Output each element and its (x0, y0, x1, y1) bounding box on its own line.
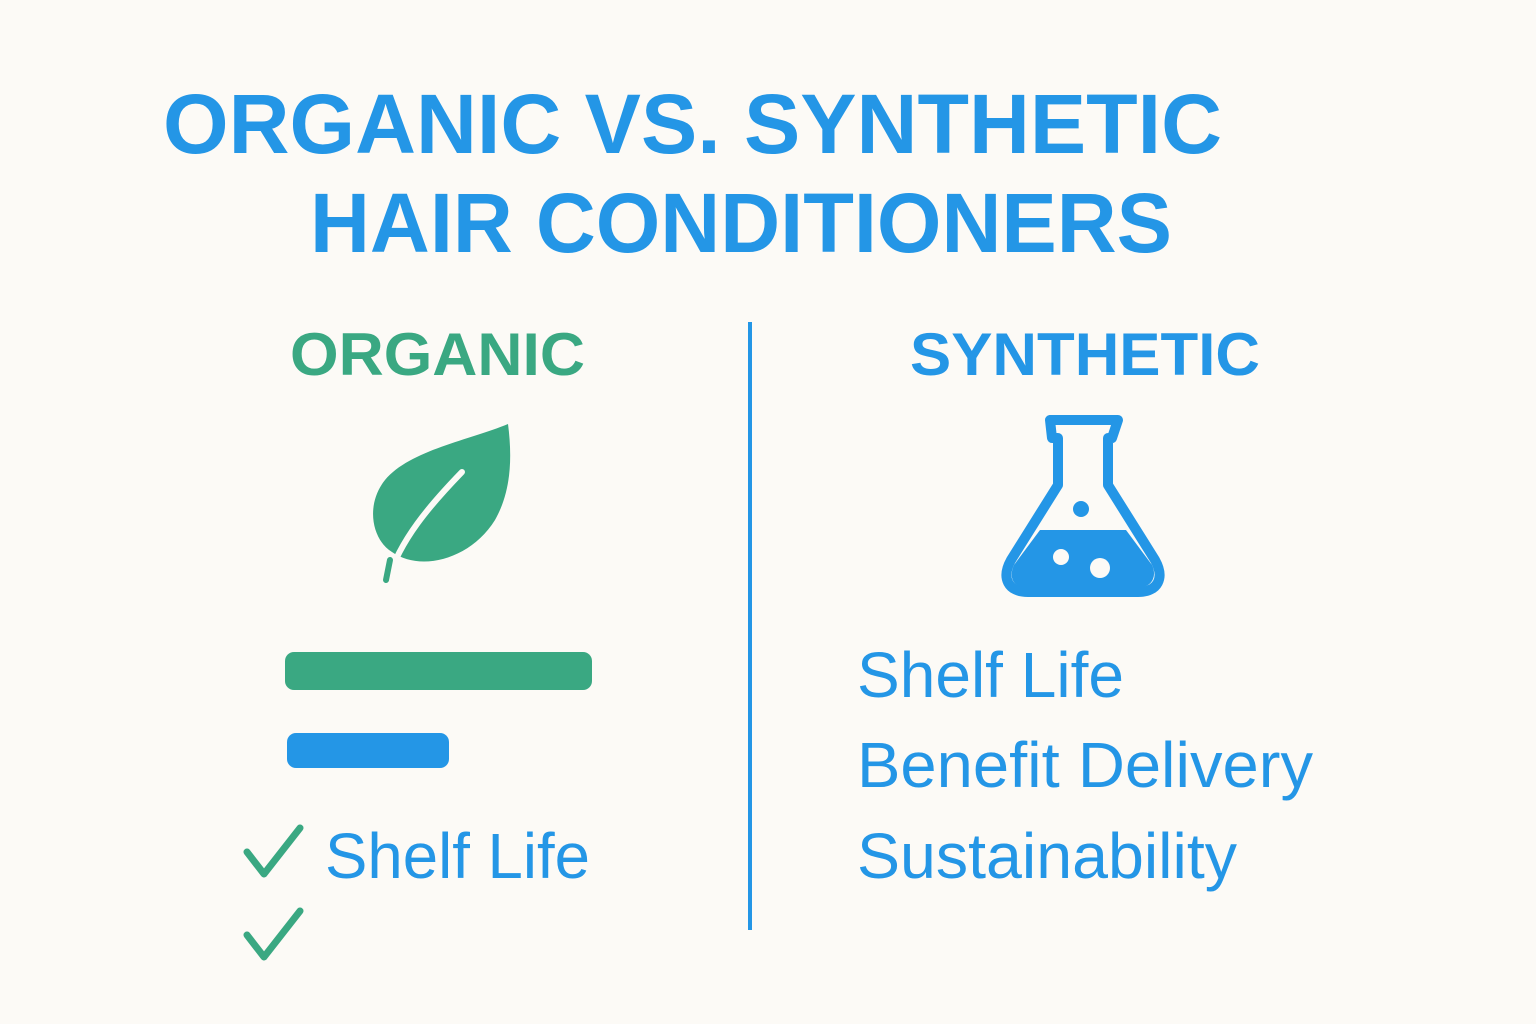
list: synthetic: Sustainability (857, 820, 1237, 892)
title: HAIR CONDITIONERS (310, 176, 1172, 270)
icon: leaf (373, 424, 510, 580)
checklist: organic (247, 820, 590, 957)
heading: synthetic: SYNTHETIC (910, 321, 1260, 388)
checklist: organic: Shelf Life (325, 820, 590, 892)
bar: organic green (285, 652, 592, 690)
list: synthetic: Benefit Delivery (857, 729, 1313, 801)
icon: flask (1006, 420, 1160, 592)
bar: organic blue (287, 733, 449, 768)
heading: organic: ORGANIC (290, 321, 585, 388)
divider (748, 322, 752, 930)
title (163, 77, 1222, 270)
list: synthetic (857, 639, 1313, 892)
title: ORGANIC VS. SYNTHETIC (163, 77, 1222, 171)
list: synthetic: Shelf Life (857, 639, 1124, 711)
